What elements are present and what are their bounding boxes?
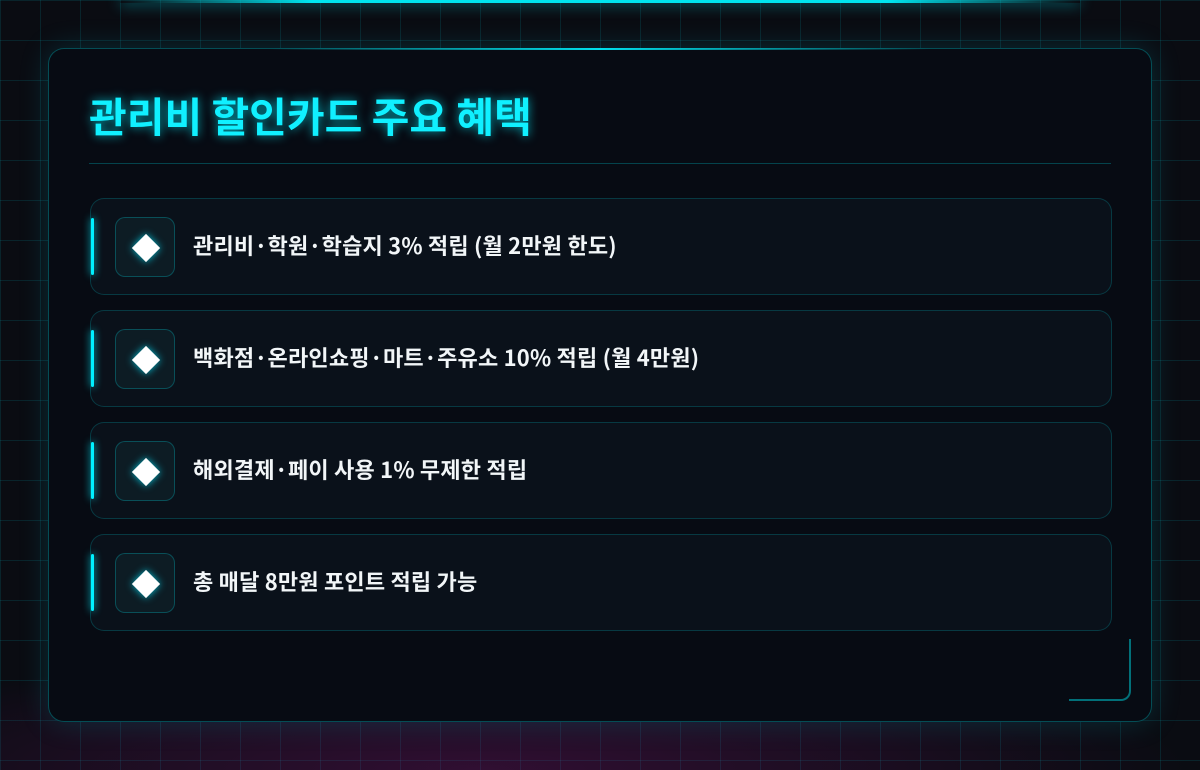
text: 총 매달 8만원 포인트 적립 가능 [193, 565, 477, 597]
text: 해외결제·페이 사용 1% 무제한 적립 [193, 453, 527, 485]
text: 백화점·온라인쇼핑·마트·주유소 10% 적립 (월 4만원) [193, 341, 699, 373]
item 2 [90, 310, 1112, 407]
title: 관리비 할인카드 주요 혜택 [89, 84, 532, 144]
item 1 [90, 198, 1112, 295]
corner bracket [1069, 639, 1131, 701]
text: 관리비·학원·학습지 3% 적립 (월 2만원 한도) [193, 229, 617, 261]
icon: diamond [115, 329, 175, 389]
item 3 [90, 422, 1112, 519]
icon: diamond [115, 217, 175, 277]
icon: diamond [115, 553, 175, 613]
item 4 [90, 534, 1112, 631]
icon: diamond [115, 441, 175, 501]
